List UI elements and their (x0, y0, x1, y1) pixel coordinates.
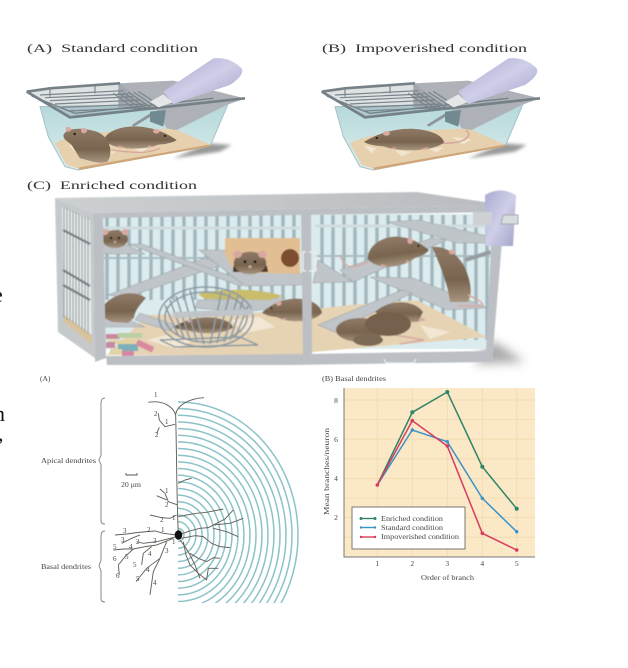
branch order numbers: 4 (153, 579, 157, 587)
branch order numbers (113, 391, 176, 587)
x-axis numbers: 5 (515, 559, 519, 568)
label: apical dendrites: Apical dendrites (41, 456, 96, 465)
cage top surface (55, 192, 505, 213)
neuron dendrites (113, 398, 243, 595)
branch order numbers: 5 (136, 575, 140, 583)
brackets (99, 398, 105, 602)
plot background (344, 388, 535, 557)
branch order numbers: 2 (160, 516, 164, 524)
branch order numbers: 3 (123, 527, 127, 535)
rats right of wheel (262, 298, 322, 321)
sitting rat left (104, 293, 146, 323)
rat on top shelf (102, 229, 128, 248)
legend (352, 507, 465, 549)
branch order numbers: 5 (133, 561, 137, 569)
line: impoverished (376, 419, 518, 551)
branch order numbers: 5 (113, 543, 117, 551)
branch order numbers: 2 (147, 526, 151, 534)
group of rats bottom right (336, 302, 424, 346)
water bottle (465, 190, 518, 262)
panel letter A: (A) (40, 374, 51, 383)
rat on ramp (340, 232, 431, 270)
rat inside wheel (173, 317, 233, 333)
label: basal dendrites: Basal dendrites (41, 562, 91, 571)
concentric sholl rings (178, 401, 299, 603)
door handles (303, 252, 416, 363)
y-axis ticks and numbers: 4 (334, 474, 338, 483)
branch order numbers: 6 (113, 555, 117, 563)
panel B: line chart of basal dendrites (322, 374, 535, 582)
branch order numbers: 6 (116, 572, 120, 580)
axes (344, 388, 535, 557)
x-axis numbers: 3 (445, 559, 449, 568)
branch order numbers: 4 (148, 550, 152, 558)
cage left side panel (55, 198, 95, 358)
branch order numbers: 5 (125, 553, 129, 561)
branch order numbers: 2 (155, 431, 159, 439)
y-axis ticks and numbers: 6 (334, 435, 338, 444)
branch order numbers: 1 (161, 526, 165, 534)
back bars (100, 214, 492, 349)
branch order numbers: 2 (136, 538, 140, 546)
clipped text fragments at the left edge (0, 282, 5, 446)
branch order numbers: 1 (154, 391, 158, 399)
y-axis ticks and numbers (334, 396, 338, 522)
legend: Impoverished condition (381, 532, 459, 541)
branch order numbers: 3 (121, 536, 125, 544)
line: standard (377, 429, 518, 533)
neuron cell body (175, 530, 182, 540)
branch order numbers: 4 (146, 566, 150, 574)
branch order numbers: 1 (172, 514, 176, 522)
running wheel (159, 287, 258, 347)
branch order numbers: 2 (154, 410, 158, 418)
toy blocks (106, 333, 154, 357)
panel B title: (B) Basal dendrites (322, 374, 386, 383)
wooden house (225, 238, 300, 274)
branch order numbers: 2 (165, 501, 169, 509)
illustration: enriched multi-level cage (55, 190, 525, 365)
platforms and ramps (102, 220, 492, 332)
heading: C Enriched condition: (C) Enriched condition (27, 178, 197, 192)
branch order numbers: 3 (165, 547, 169, 555)
branch order numbers: 1 (165, 487, 169, 495)
illustration: impoverished cage with one rat (322, 58, 540, 170)
heading: B Impoverished condition: (B) Impoverished condition (322, 41, 527, 55)
cage front frame (93, 205, 505, 365)
grid (344, 388, 535, 557)
panel A: neuron diagram (40, 376, 299, 603)
scale bar (121, 473, 141, 489)
y-axis ticks and numbers: 8 (334, 396, 338, 405)
x-axis numbers: 2 (410, 559, 414, 568)
baseline rule under illustration (20, 365, 550, 367)
branch order numbers: 1 (165, 418, 169, 426)
branch order numbers: 1 (172, 538, 176, 546)
legend: Standard condition (381, 523, 443, 532)
y-axis ticks and numbers: 2 (334, 513, 338, 522)
x-axis numbers: 1 (375, 559, 379, 568)
branch order numbers: 3 (153, 537, 157, 545)
cage shadow (475, 340, 525, 364)
branch order numbers: 4 (129, 543, 133, 551)
standing rat (432, 247, 483, 306)
food tray (198, 290, 283, 300)
illustration: standard cage with two rats (27, 58, 245, 170)
x-axis numbers: 4 (480, 559, 484, 568)
heading: A Standard condition: (A) Standard condition (27, 41, 198, 55)
scale bar: 20 μm (121, 481, 141, 489)
legend: Enriched condition (381, 514, 443, 523)
x-axis numbers (375, 559, 519, 568)
rat in house (233, 250, 267, 274)
line: enriched (377, 390, 518, 510)
bedding floor (107, 300, 487, 356)
x-axis title: Order of branch (421, 573, 474, 582)
y-axis title: Mean branches/neuron (322, 428, 331, 515)
